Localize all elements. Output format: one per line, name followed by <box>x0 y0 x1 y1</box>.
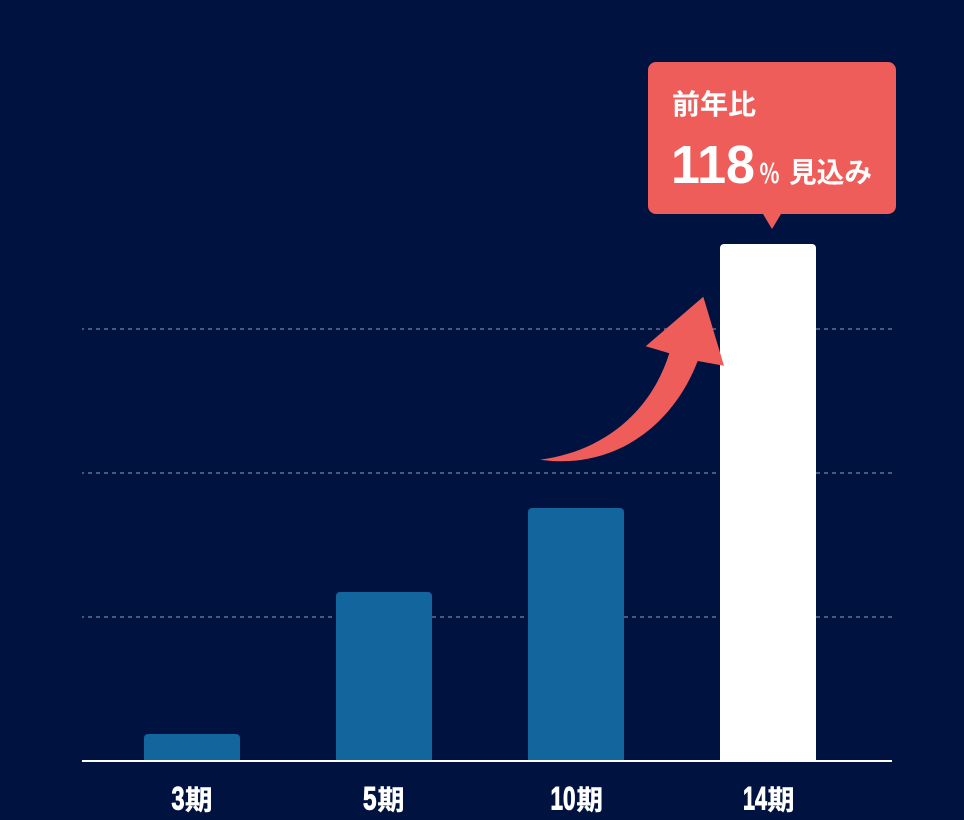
axis baseline <box>82 760 892 762</box>
label: 5期: 5 <box>363 780 376 816</box>
callout box <box>648 62 896 229</box>
label: 5期: 期 <box>378 778 404 818</box>
callout <box>648 62 896 229</box>
label: 3期 <box>172 778 212 818</box>
callout note: 見込み <box>789 151 872 191</box>
label: 3期: 3 <box>172 780 184 816</box>
label: 10期: 10 <box>550 780 576 816</box>
callout value: 118 <box>671 135 755 195</box>
label: 14期: 期 <box>768 778 794 818</box>
arrow: growth <box>540 297 724 461</box>
label: 3期: 期 <box>185 778 212 818</box>
callout unit: % <box>760 152 780 191</box>
label: 14期 <box>743 778 794 818</box>
label: 14期: 14 <box>743 780 767 816</box>
bar: 5期 <box>336 592 432 761</box>
label: 10期: 期 <box>576 778 603 818</box>
bar: 14期 <box>720 244 816 761</box>
label: 5期 <box>363 778 404 818</box>
label: 10期 <box>550 778 603 818</box>
callout heading: 前年比 <box>672 83 756 123</box>
bar: 3期 <box>144 734 240 761</box>
bar: 10期 <box>528 508 624 761</box>
